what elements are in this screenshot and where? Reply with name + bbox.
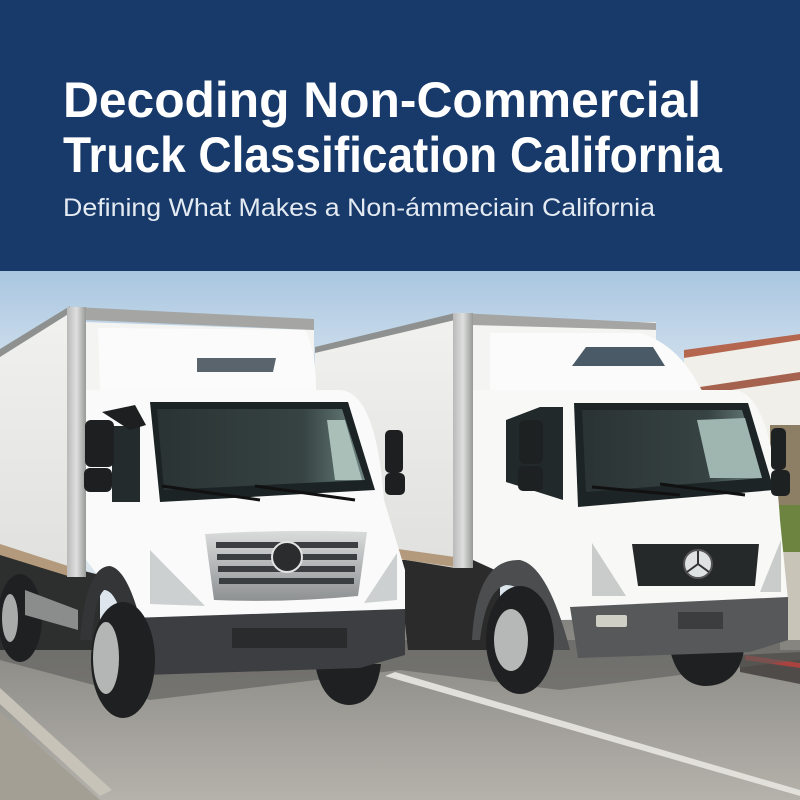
road markings	[0, 672, 800, 800]
box corner post	[453, 313, 473, 568]
windshield	[574, 403, 774, 507]
door window	[506, 407, 563, 500]
far mirror	[771, 428, 786, 470]
mirror	[85, 420, 114, 467]
title: Truck Classification California	[63, 127, 723, 183]
sky	[0, 271, 800, 641]
far mirror	[385, 430, 403, 473]
cab body	[473, 390, 788, 620]
box front and roof fairing	[85, 322, 314, 395]
grille	[632, 544, 759, 586]
bumper	[130, 609, 405, 675]
grille	[205, 531, 367, 601]
door window	[112, 426, 140, 502]
headlights	[592, 543, 626, 596]
wipers	[592, 484, 745, 495]
fender arch	[472, 560, 570, 650]
right wheel	[670, 650, 744, 686]
cargo box side	[0, 308, 70, 575]
rear wheels	[0, 574, 42, 662]
mirror	[519, 420, 543, 464]
title	[63, 72, 723, 183]
right wheel	[315, 664, 381, 705]
truck: left	[0, 306, 405, 718]
box front and roof fairing	[470, 322, 656, 395]
cab body	[86, 390, 405, 625]
title: Decoding Non-Commercial	[63, 72, 701, 128]
bumper	[570, 597, 788, 658]
front wheel	[486, 586, 554, 694]
subtitle: Defining What Makes a Non-ámmeciain California	[63, 194, 655, 222]
headlights	[150, 550, 205, 606]
windshield	[150, 402, 375, 502]
cargo box side	[315, 318, 455, 568]
under chassis	[0, 550, 100, 650]
box corner post	[67, 307, 86, 577]
truck: right	[315, 313, 790, 694]
under chassis	[398, 560, 500, 650]
photo: trucks in a parking lot	[0, 271, 800, 800]
wipers	[162, 486, 355, 500]
background building	[684, 334, 800, 684]
road surface	[0, 620, 800, 800]
fender arch	[80, 566, 145, 640]
banner background	[0, 0, 800, 271]
front wheel	[91, 602, 155, 718]
ground shadow under trucks	[0, 640, 800, 700]
